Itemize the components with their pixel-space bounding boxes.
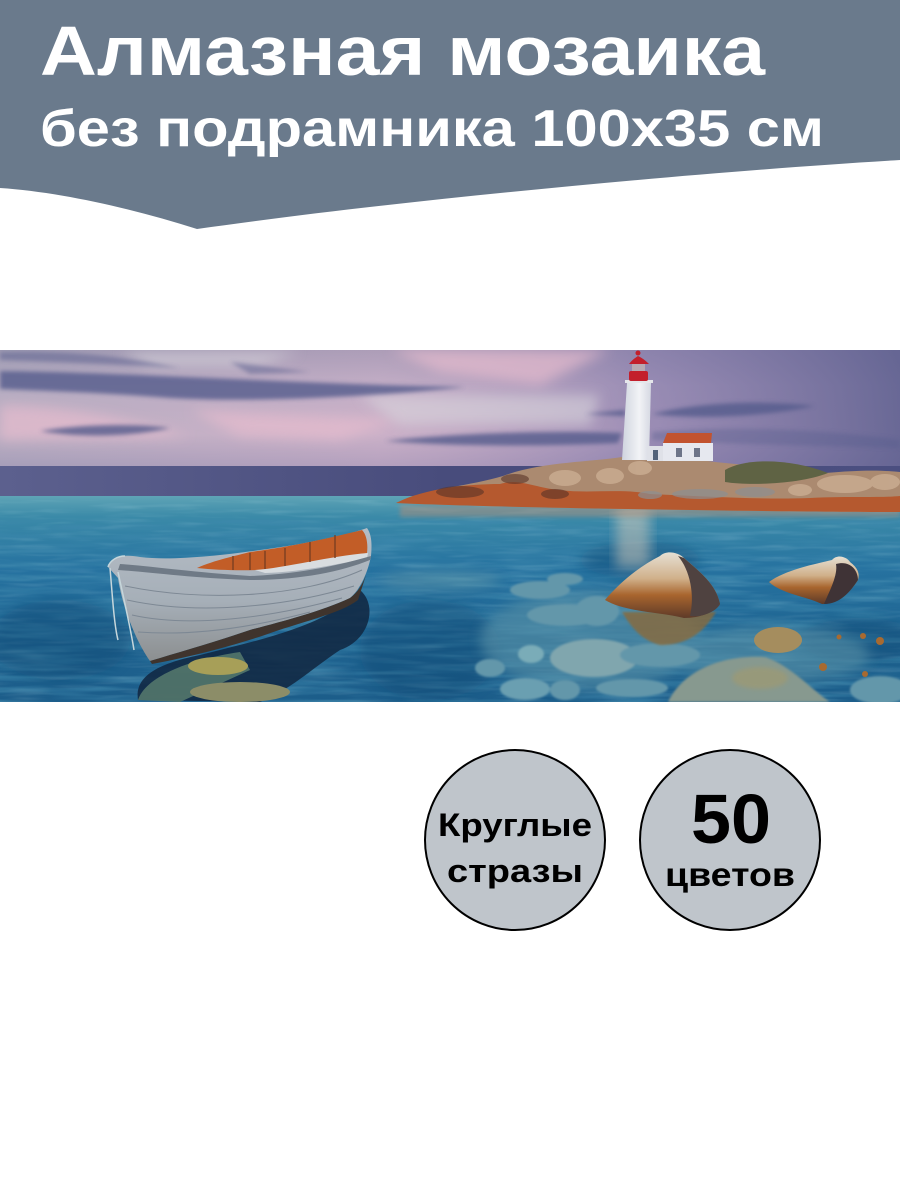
badge: 50 colours bbox=[640, 750, 820, 930]
horizon cloud band bbox=[0, 466, 900, 498]
panoramic photo: boat and lighthouse bbox=[0, 350, 900, 704]
shallow seabed stones bbox=[380, 570, 900, 704]
badge: round rhinestones bbox=[425, 750, 605, 930]
sea bbox=[0, 496, 900, 702]
badge: 50 colours: 50 bbox=[691, 780, 771, 858]
badge: 50 colours: цветов bbox=[665, 856, 795, 893]
header banner bbox=[0, 0, 900, 229]
lighthouse bbox=[622, 350, 653, 460]
large rock in water bbox=[605, 552, 720, 618]
keeper's house bbox=[647, 433, 713, 461]
badge: round rhinestones: стразы bbox=[447, 853, 583, 889]
rowing boat bbox=[108, 528, 372, 702]
title: Алмазная мозаика bbox=[40, 12, 766, 90]
badge: round rhinestones: Круглые bbox=[438, 807, 592, 843]
rock reflection bbox=[622, 612, 716, 645]
water reflection of lighthouse bbox=[616, 506, 650, 568]
sky bbox=[0, 350, 900, 470]
right rock in water bbox=[769, 556, 859, 604]
headland rocks bbox=[396, 457, 900, 512]
small submerged rock bbox=[754, 627, 802, 653]
subtitle: без подрамника 100х35 см bbox=[40, 100, 824, 158]
